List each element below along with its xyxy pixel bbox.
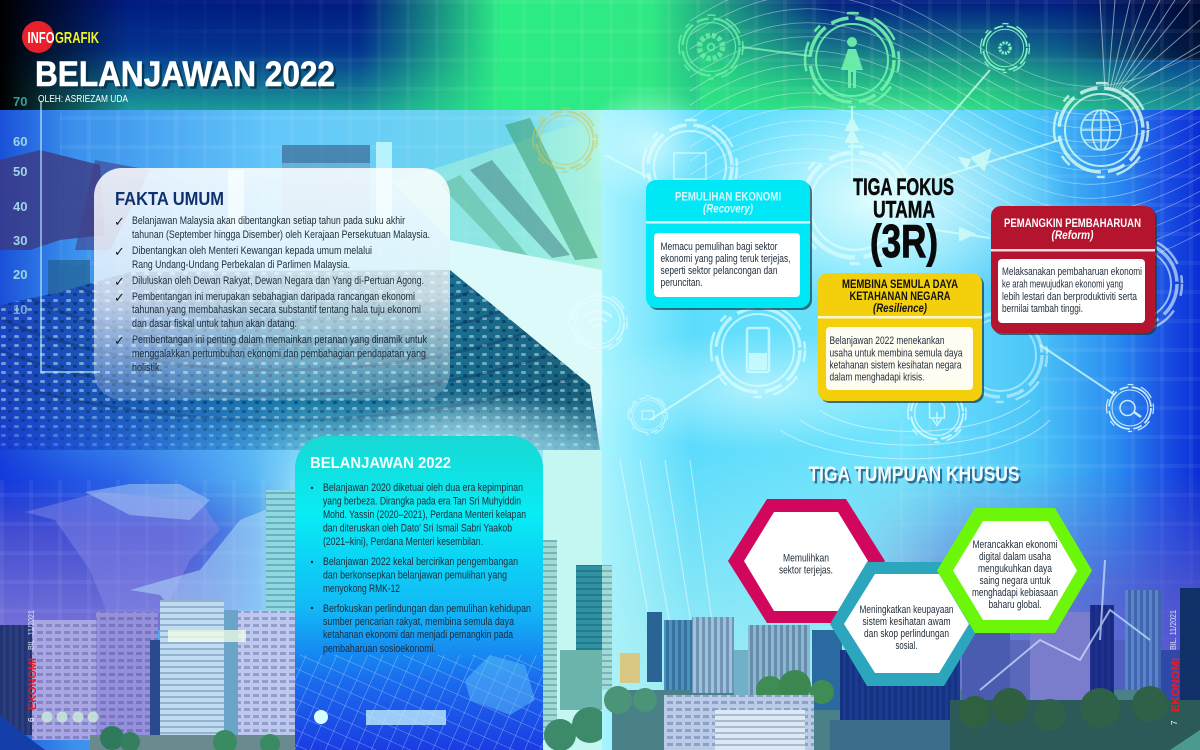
card: membina semula daya ketahanan: Belanjawan 2022 menekankan — [830, 335, 944, 347]
card: pemulihan ekonomi: peruncitan. — [660, 277, 702, 289]
folio: right page: 7 — [1170, 720, 1179, 725]
card: pemulihan ekonomi — [646, 180, 812, 310]
badge: infografik: GRAFIK — [55, 30, 99, 47]
heading: fakta umum: FAKTA UMUM — [115, 188, 224, 209]
hexagon: kesihatan awam: dan skop perlindungan — [864, 628, 949, 640]
card: pemangkin pembaharuan: ke arah mewujudkan ekonomi yang — [1002, 278, 1123, 290]
list: belanjawan 2022 points: menyokong RMK-12 — [323, 583, 400, 595]
list: fakta umum points: holistik. — [132, 362, 162, 374]
chart axis overlay: 50 — [13, 164, 27, 179]
icon: gear ring — [679, 15, 743, 79]
card: membina semula daya ketahanan: KETAHANAN NEGARA — [850, 289, 951, 303]
list: fakta umum points: Pembentangan ini merupakan sebahagian daripada rancangan ekonomi — [132, 291, 415, 303]
heading: tiga fokus utama 3R — [853, 174, 954, 267]
card: pemangkin pembaharuan: lebih lestari dan berproduktiviti serta — [1002, 291, 1137, 303]
card: pemulihan ekonomi: seperti sektor pelancongan dan — [660, 265, 778, 277]
list: fakta umum points: Pembentangan ini penting dalam memainkan peranan yang dinamik untuk — [132, 334, 427, 346]
list: fakta umum points — [114, 215, 430, 374]
list: fakta umum points: ✓ — [114, 291, 125, 306]
list: belanjawan 2022 points: yang berbeza. Dirangka pada era Tan Sri Muhyiddin — [323, 496, 521, 508]
card: pemulihan ekonomi: ekonomi yang paling teruk terjejas, — [660, 253, 790, 265]
card: pemangkin pembaharuan: PEMANGKIN PEMBAHARUAN — [1004, 216, 1141, 230]
hexagon: kesihatan awam: Meningkatkan keupayaan — [860, 604, 954, 616]
card: pemulihan ekonomi: Memacu pemulihan bagi sektor — [660, 241, 778, 253]
folio: right page — [1168, 610, 1182, 725]
hexagon: ekonomi digital — [937, 508, 1092, 633]
hexagon: memulihkan sektor terjejas — [728, 499, 885, 623]
list: belanjawan 2022 points: Berfokuskan perlindungan dan pemulihan kehidupan — [323, 603, 531, 615]
list: fakta umum points: Diluluskan oleh Dewan Rakyat, Dewan Negara dan Yang di-Pertuan Agong. — [132, 275, 424, 287]
icon: globe ring — [1054, 83, 1148, 177]
badge: infografik — [22, 21, 99, 53]
list: belanjawan 2022 points: ketahanan ekonomi dan menjadi pemangkin pada — [323, 629, 513, 641]
chart axis overlay: 70 — [13, 94, 27, 109]
card: membina semula daya ketahanan: MEMBINA SEMULA DAYA — [842, 277, 958, 291]
list: fakta umum points: ✓ — [114, 275, 125, 290]
hexagon: ekonomi digital: menghadapi kebiasaan — [972, 587, 1058, 599]
card: pemangkin pembaharuan: bernilai tambah tinggi. — [1002, 303, 1083, 315]
card: pemangkin pembaharuan — [991, 206, 1157, 335]
chart axis overlay: 10 — [13, 302, 27, 317]
list: fakta umum points: tahunan (September hingga Disember) oleh Kerajaan Persekutuan Malaysia. — [132, 229, 430, 241]
list: fakta umum points: Dibentangkan oleh Menteri Kewangan kepada umum melalui — [132, 245, 372, 257]
icon: printer ring — [628, 395, 668, 435]
icon: globe search ring — [1106, 384, 1154, 432]
hexagon: kesihatan awam: sistem kesihatan awam — [862, 616, 951, 628]
list: fakta umum points: menggalakkan pertumbuhan ekonomi dan pembahagian pendapatan yang — [132, 348, 426, 360]
icon: monitor ring — [643, 120, 737, 214]
heading: tiga fokus utama 3R: (3R) — [870, 215, 938, 267]
hexagon: ekonomi digital: baharu global. — [988, 599, 1042, 611]
hexagon: kesihatan awam: sosial. — [896, 640, 918, 652]
heading: belanjawan 2022 title: BELANJAWAN 2022 — [35, 55, 335, 94]
list: belanjawan 2022 points: sumber pencarian rakyat, membina semula daya — [323, 616, 514, 628]
icon: wifi ring — [569, 293, 627, 351]
list: belanjawan 2022 points: Mohd. Yassin (2020–2021), Perdana Menteri kelapan — [323, 509, 526, 521]
list: belanjawan 2022 points: Belanjawan 2022 kekal bercirikan pengembangan — [323, 556, 518, 568]
background: city skyline, right page — [602, 560, 1200, 750]
chart axis overlay — [13, 94, 100, 372]
list: fakta umum points: tahunan yang membahaskan secara substantif tentang hala tuju ekonomi — [132, 304, 421, 316]
card: pemulihan ekonomi: (Recovery) — [703, 202, 753, 216]
icon: save ring — [908, 384, 966, 442]
icon: reform side ring — [1088, 237, 1182, 331]
icon: orange gear ring — [533, 108, 597, 172]
hexagon: ekonomi digital: mengukuhkan daya — [978, 563, 1052, 575]
folio: right page: EKONOMI — [1170, 658, 1182, 712]
hexagon: kesihatan awam — [830, 562, 981, 686]
list: fakta umum points: ✓ — [114, 334, 125, 349]
folio: left page: 6 — [27, 717, 36, 722]
list: belanjawan 2022 points: dan berkonsepkan belanjawan pemulihan yang — [323, 570, 507, 582]
panel: fakta umum — [94, 168, 450, 400]
list: fakta umum points: ✓ — [114, 215, 125, 230]
background: world map and city, left page — [0, 450, 610, 750]
list: belanjawan 2022 points: Belanjawan 2020 diketuai oleh dua era kepimpinan — [323, 482, 523, 494]
icon: resilience side ring — [953, 308, 1047, 402]
hexagon: ekonomi digital: Merancakkan ekonomi — [972, 539, 1058, 551]
list: belanjawan 2022 points: (2021–kini), Perdana Menteri kesembilan. — [323, 536, 483, 548]
list: belanjawan 2022 points: pembaharuan sosioekonomi. — [323, 643, 436, 655]
chart axis overlay: 40 — [13, 199, 27, 214]
card: membina semula daya ketahanan: usaha untuk membina semula daya — [830, 348, 962, 360]
list: fakta umum points: ✓ — [114, 245, 125, 260]
list: belanjawan 2022 points: dan diteruskan oleh Dato’ Sri Ismail Sabri Yaakob — [323, 522, 512, 534]
folio: left page: BIL. 11/2021 — [26, 610, 36, 650]
folio: left page — [26, 610, 39, 722]
heading: tiga fokus utama 3R: TIGA FOKUS — [853, 174, 954, 201]
heading: belanjawan 2022 title: BELANJAWAN 2022 — [38, 58, 338, 96]
byline: OLEH: ASRIEZAM UDA — [38, 94, 128, 105]
chart axis overlay: 60 — [13, 134, 27, 149]
badge: infografik: INFO — [28, 30, 54, 47]
card: membina semula daya ketahanan: dalam menghadapi krisis. — [830, 372, 924, 384]
background: header band — [0, 0, 1200, 110]
card: membina semula daya ketahanan — [818, 273, 984, 403]
icon: person ring — [805, 13, 899, 107]
card: pemulihan ekonomi: PEMULIHAN EKONOMI — [675, 190, 781, 204]
list: fakta umum points: Belanjawan Malaysia akan dibentangkan setiap tahun pada suku akhir — [132, 215, 405, 227]
heading: tiga fokus utama 3R: UTAMA — [873, 196, 935, 224]
list: fakta umum points: Rang Undang-Undang Perbekalan di Parlimen Malaysia. — [132, 259, 350, 271]
heading: tiga tumpuan khusus: TIGA TUMPUAN KHUSUS — [808, 463, 1020, 486]
hexagon: memulihkan sektor terjejas: sektor terjejas. — [779, 564, 833, 576]
folio: right page: BIL. 11/2021 — [1168, 610, 1178, 650]
hexagon: ekonomi digital: digital dalam usaha — [979, 551, 1051, 563]
hexagon: memulihkan sektor terjejas: Memulihkan — [783, 552, 829, 564]
icon: small gear ring — [981, 24, 1029, 72]
panel: belanjawan 2022 — [295, 436, 543, 750]
background: parliament hall photo — [0, 110, 602, 750]
card: pemangkin pembaharuan: Melaksanakan pembaharuan ekonomi — [1002, 266, 1142, 278]
chart axis overlay: 20 — [13, 267, 27, 282]
folio: left page: EKONOMI — [27, 658, 39, 710]
card: membina semula daya ketahanan: ketahanan sistem kesihatan negara — [830, 360, 962, 372]
heading: belanjawan 2022: BELANJAWAN 2022 — [310, 455, 451, 472]
icon: phone ring — [711, 303, 805, 397]
icon: central ring — [796, 146, 914, 264]
card: membina semula daya ketahanan: (Resilience) — [873, 301, 927, 315]
heading: tiga tumpuan khusus: TIGA TUMPUAN KHUSUS — [810, 466, 1022, 488]
card: pemangkin pembaharuan: (Reform) — [1052, 228, 1094, 242]
background: tech network, right page — [580, 0, 1200, 750]
title block — [22, 21, 338, 105]
chart axis overlay: 30 — [13, 233, 27, 248]
arrows: network connectors — [605, 47, 1115, 420]
list: belanjawan 2022 points — [311, 482, 531, 655]
list: fakta umum points: dan dasar fiskal untuk tahun akan datang. — [132, 318, 297, 330]
hexagon: ekonomi digital: saing negara untuk — [980, 575, 1051, 587]
